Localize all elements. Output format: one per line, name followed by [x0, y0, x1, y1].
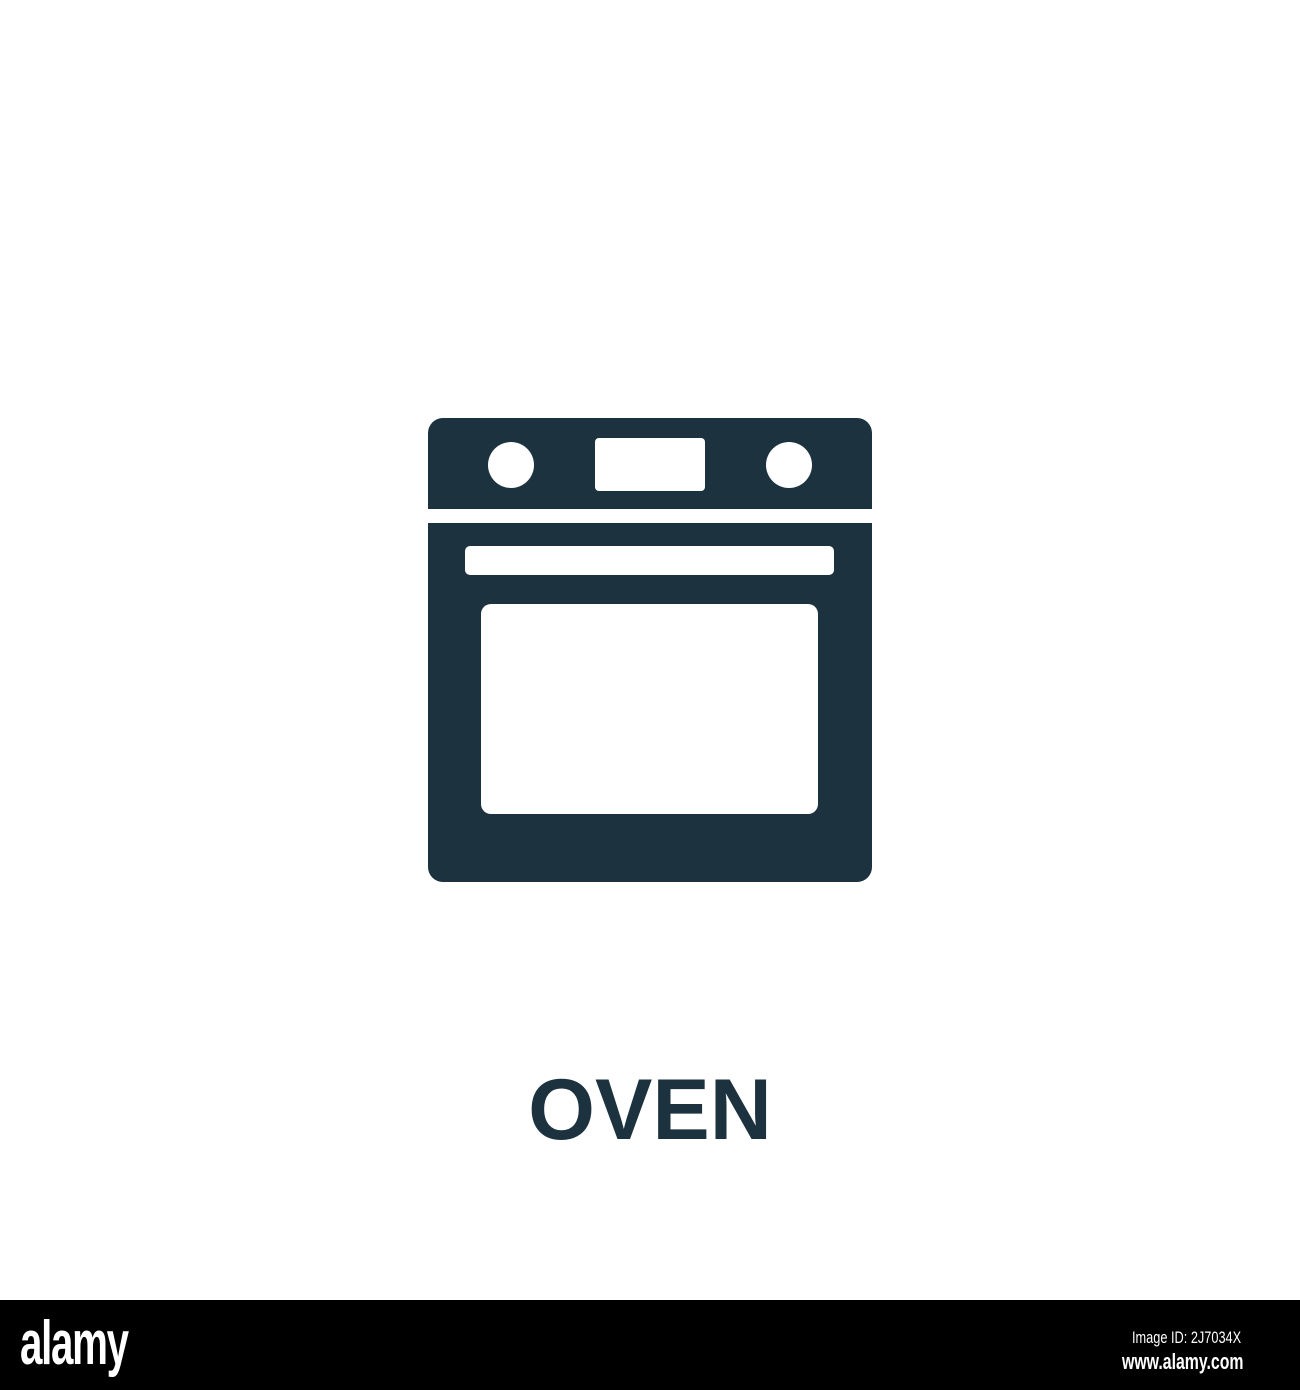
title: OVEN: OVEN: [528, 1062, 772, 1158]
text: image id: Image ID: 2J7034X: [1132, 1328, 1241, 1347]
footer bar: [0, 1300, 1300, 1390]
text: url: www.alamy.com: [1122, 1349, 1243, 1374]
logo: alamy: alamy: [20, 1309, 128, 1378]
